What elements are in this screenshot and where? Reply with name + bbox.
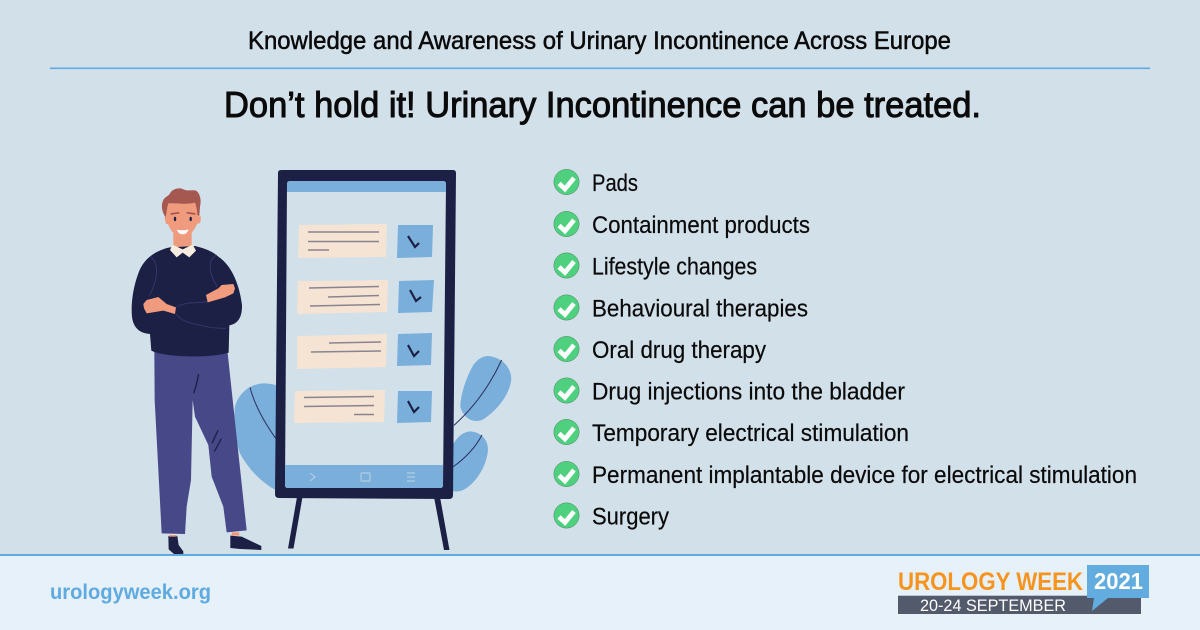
item: Drug injections into the bladder: Drug injections into the bladder	[592, 378, 905, 406]
hands	[143, 284, 235, 314]
header title: Knowledge and Awareness of Urinary Incontinence Across Europe	[248, 27, 951, 55]
board legs	[288, 497, 450, 550]
row 3	[297, 333, 432, 369]
trouser creases	[194, 374, 221, 452]
speech bubble	[1087, 565, 1149, 611]
illustration: man with crossed arms	[132, 188, 261, 555]
item: Behavioural therapies: Behavioural therapies	[592, 296, 808, 322]
ankles	[169, 532, 239, 537]
illustration: leaves behind board	[234, 356, 511, 491]
main heading: Don’t hold it! Urinary Incontinence can be treated.	[224, 84, 981, 125]
footer band	[0, 554, 1200, 630]
item: Surgery: Surgery	[592, 504, 669, 530]
item: Pads	[554, 169, 638, 197]
row 2	[297, 280, 434, 314]
illustration: digital board	[275, 170, 456, 550]
screen nav icons	[310, 473, 415, 481]
row 1	[298, 224, 433, 258]
item: Oral drug therapy: Oral drug therapy	[592, 337, 766, 364]
date bar	[898, 596, 1141, 614]
trousers	[154, 350, 247, 534]
hair	[162, 188, 201, 217]
neck	[173, 232, 192, 247]
treatment checklist	[554, 169, 1137, 531]
item: Lifestyle changes: Lifestyle changes	[592, 254, 757, 280]
screen top bar	[287, 181, 446, 192]
board screen	[285, 181, 446, 488]
item: Pads: Pads	[592, 170, 638, 197]
item: Temporary electrical stimulation: Temporary electrical stimulation	[592, 420, 909, 447]
sweater	[132, 246, 242, 356]
item: Permanent implantable device: Permanent implantable device for electrical stimulation	[592, 462, 1137, 489]
collar	[170, 245, 196, 257]
face	[166, 200, 199, 239]
logo: Urology Week 2021	[898, 565, 1149, 615]
left eye	[174, 217, 176, 221]
logo dates: 20-24 SEPTEMBER	[920, 597, 1066, 615]
eyebrows	[171, 213, 195, 214]
logo year: 2021	[1094, 568, 1143, 594]
item: Containment products: Containment products	[592, 212, 810, 239]
sweater seams	[149, 255, 226, 328]
right eye	[190, 217, 192, 221]
row 4	[294, 390, 432, 423]
website link: urologyweek.org	[50, 581, 211, 604]
board frame	[275, 170, 456, 499]
ears	[164, 216, 201, 224]
smile	[177, 229, 189, 234]
shoes	[168, 536, 261, 555]
logo name: UROLOGY WEEK	[898, 568, 1083, 596]
screen bottom bar	[285, 465, 443, 488]
item: Surgery	[554, 503, 669, 530]
